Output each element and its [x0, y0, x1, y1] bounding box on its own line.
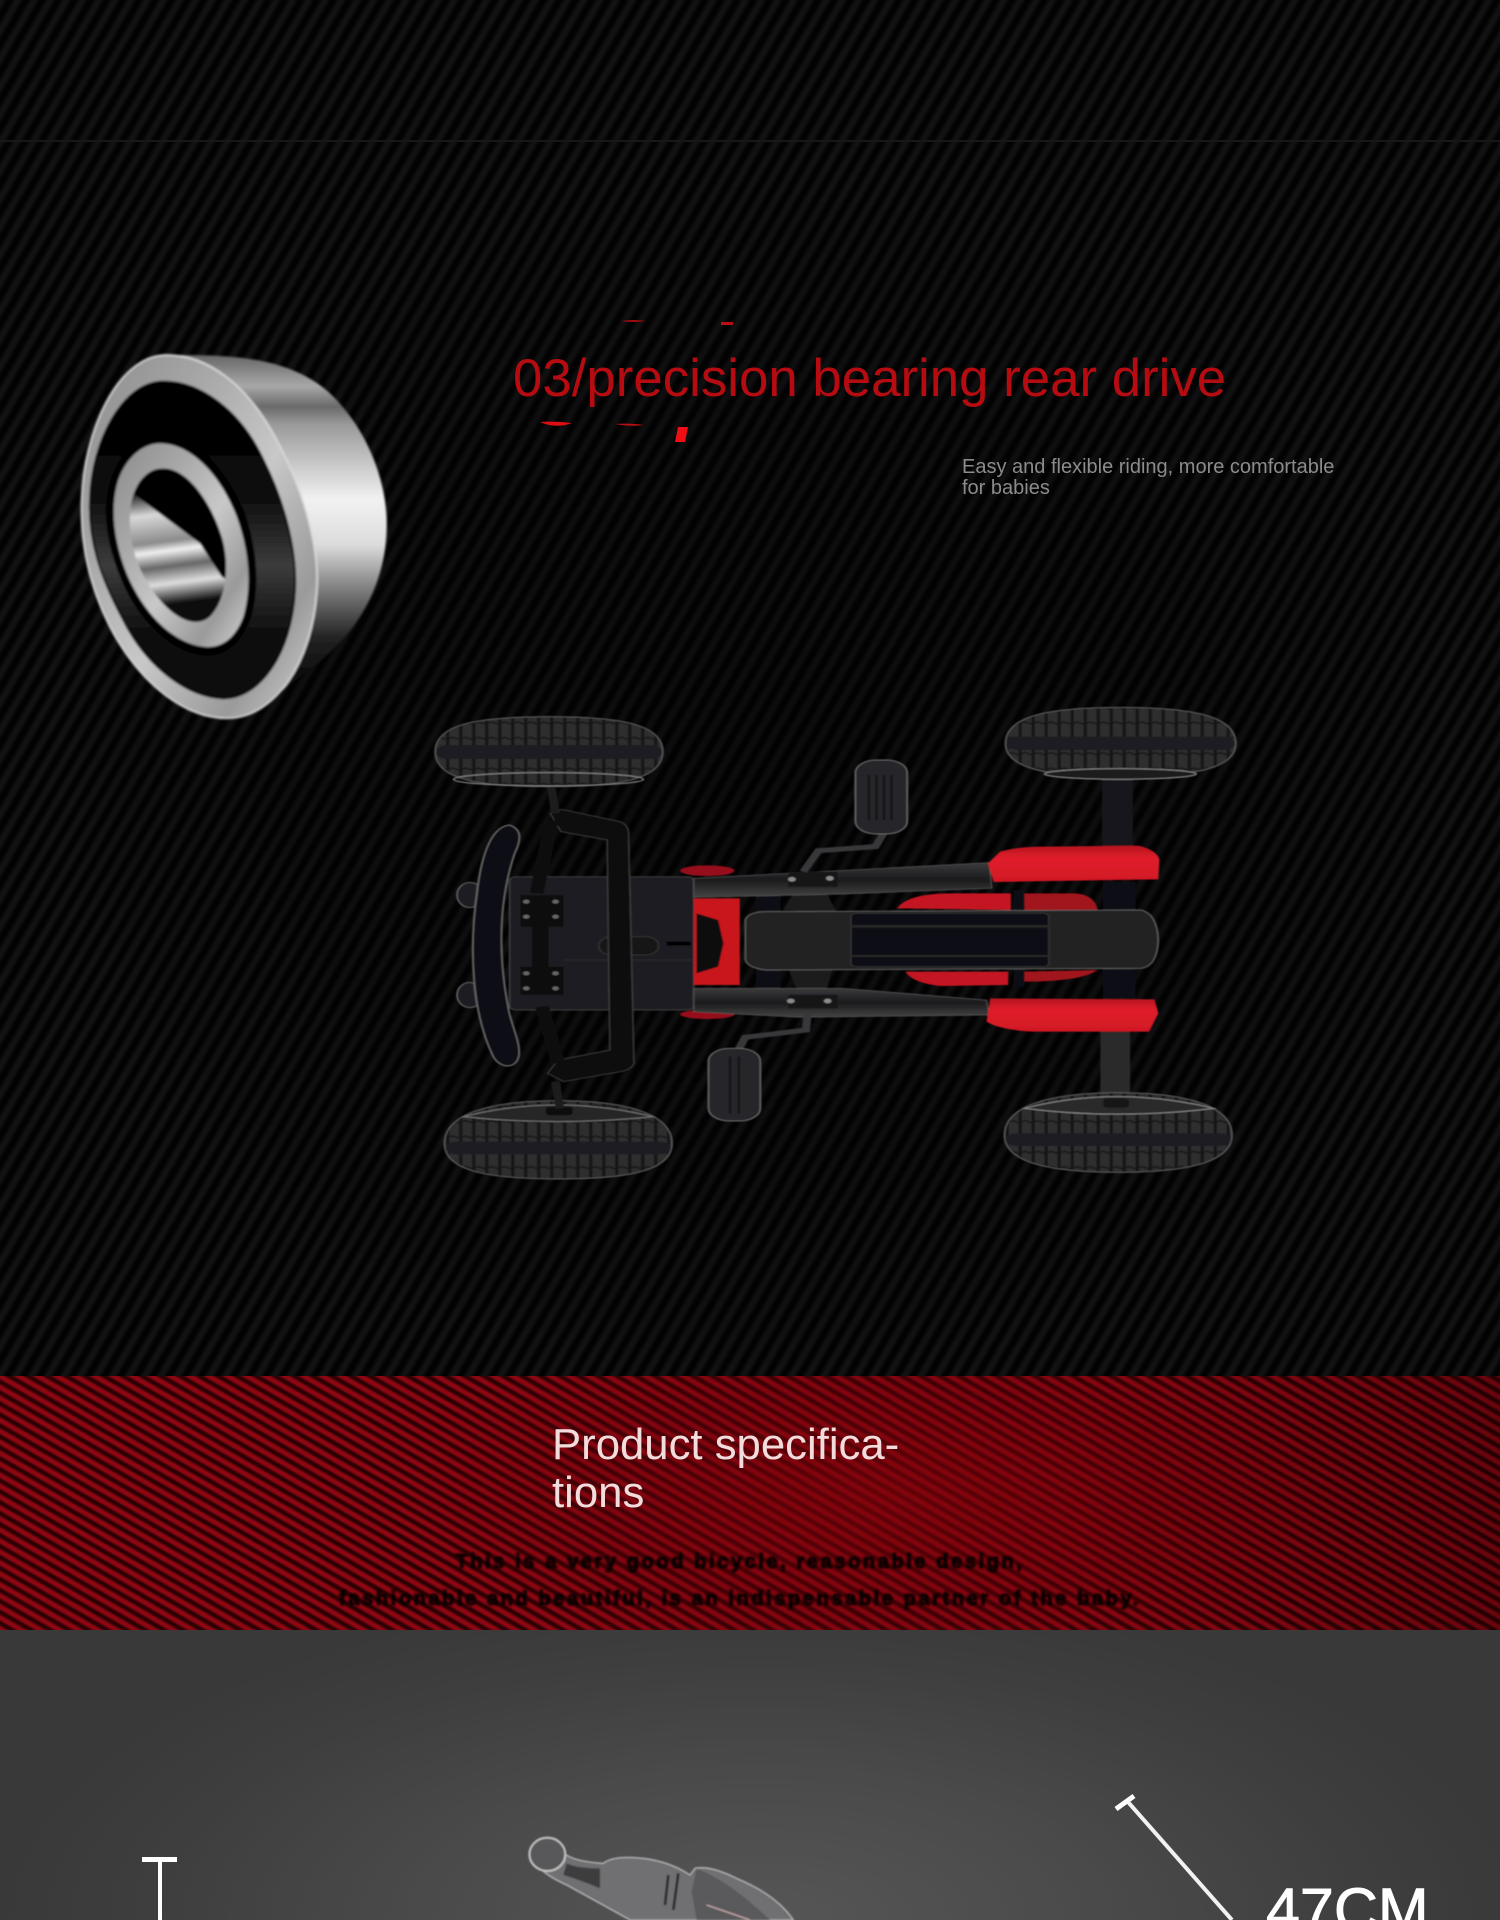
subtitle text: Easy and flexible riding, more comfortable for babies — [962, 456, 1334, 499]
wheel: bottom left — [444, 1101, 672, 1179]
product image: handlebar grip — [528, 1836, 795, 1920]
bearing face ring — [81, 355, 317, 718]
panel: red product specifications banner — [0, 1376, 1500, 1630]
red rear guards — [986, 846, 1159, 1032]
title: 03/precision bearing rear drive — [513, 349, 1226, 408]
icon: ball bearing — [79, 352, 388, 721]
pedal: lower — [708, 1013, 808, 1121]
wheel: top left — [435, 717, 663, 787]
bearing outer barrel — [173, 355, 387, 713]
bearing inner ring shadow — [106, 435, 256, 656]
dimension marker: diagonal arrow — [1114, 1794, 1234, 1920]
steering handle — [473, 825, 520, 1066]
heading: product specifications — [552, 1420, 899, 1517]
dimension marker: vertical bar — [142, 1857, 177, 1920]
center body — [745, 910, 1158, 970]
red panel — [694, 898, 740, 985]
heading: product specifications: tions — [552, 1468, 644, 1517]
rear axles — [1100, 773, 1133, 1098]
blurred description text: fashionable and beautiful, is an indispensable partner of the baby. — [339, 1588, 1141, 1610]
bearing inner ring — [114, 443, 248, 647]
bearing rubber seal — [90, 382, 295, 698]
bearing bore — [129, 467, 228, 624]
blurred description text — [338, 1551, 1141, 1611]
product image: pedal car from below — [434, 706, 1238, 1180]
pedal: upper — [803, 760, 907, 872]
small red hubs — [680, 865, 734, 1019]
steering link frame — [537, 787, 634, 1108]
side knobs — [457, 882, 483, 1008]
seat base body — [509, 877, 694, 1010]
panel: grey dimensions section — [0, 1630, 1500, 1920]
frame tubes — [694, 863, 992, 1017]
wheel: top right — [1005, 707, 1236, 779]
blurred description text: This is a very good bicycle, reasonable design, — [455, 1551, 1025, 1573]
mid struts — [756, 882, 1136, 998]
wheel: bottom right — [1004, 1093, 1232, 1172]
heading: product specifications: Product specifica- — [552, 1420, 899, 1469]
red title fragments — [540, 320, 733, 442]
panel: dark striped background — [0, 0, 1500, 1376]
red discs — [897, 893, 1098, 986]
